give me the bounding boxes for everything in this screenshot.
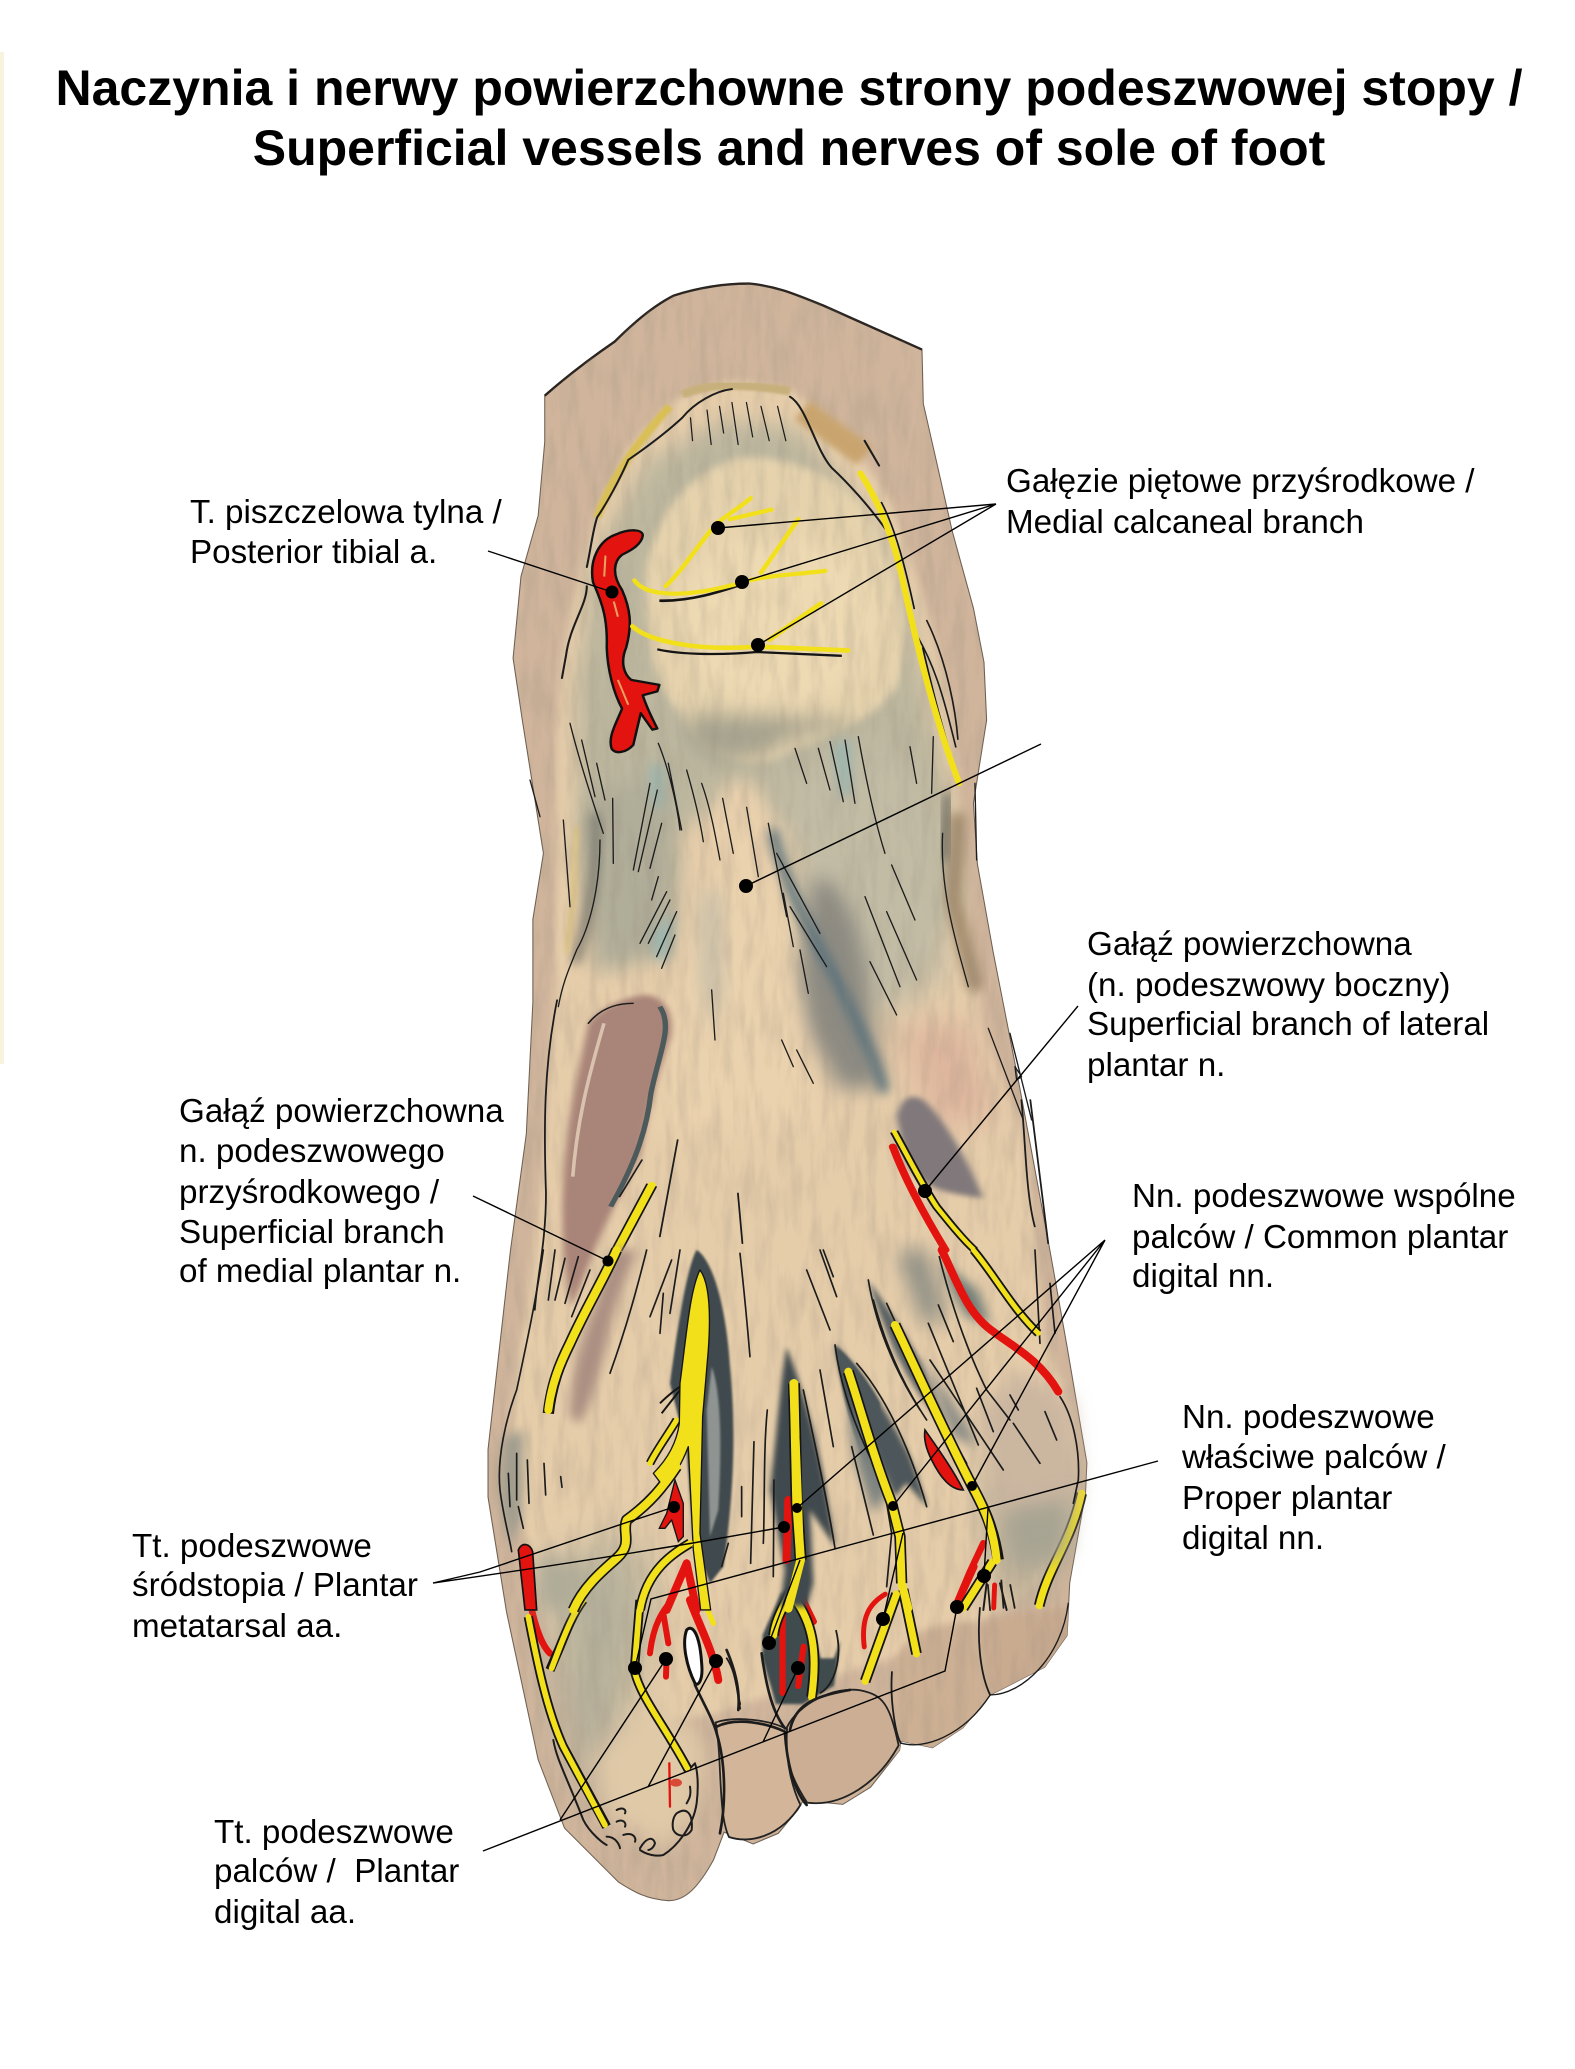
leader: posterior tibial — [488, 551, 618, 598]
medial nerve — [548, 1250, 617, 1410]
centre wedge dark — [770, 1347, 835, 1607]
leaders: medial calcaneal — [711, 504, 996, 652]
inner contour right — [790, 397, 885, 529]
artery lateral stub — [518, 1544, 537, 1610]
lateral artery — [942, 1250, 1058, 1392]
big-toe artery fork — [667, 1563, 697, 1610]
deep gray patch — [800, 877, 883, 1090]
artery centre — [783, 1599, 814, 1693]
ball shadow — [1003, 1497, 1070, 1567]
lesser toe bottom edges — [901, 1603, 1068, 1745]
leaders: plantar digital — [483, 1600, 964, 1851]
left gray band — [583, 770, 680, 973]
web toe tendon lines — [983, 1583, 1007, 1610]
lateral gray shade — [500, 1430, 523, 1550]
title: Superficial vessels and nerves of sole of foot — [253, 120, 1326, 176]
leader: lateral superficial branch — [918, 1006, 1078, 1198]
gray stripe in centre — [702, 887, 722, 1033]
left pit — [562, 995, 671, 1307]
digital trunk outlines — [848, 1325, 998, 1583]
third wedge dark — [835, 1345, 880, 1490]
inner tissue — [512, 380, 1079, 1728]
label: proper plantar digital: Proper plantar — [1182, 1480, 1392, 1517]
small branches outline — [650, 1420, 677, 1463]
left pit pale streak — [573, 1023, 604, 1177]
calcaneal nerve 2 — [632, 603, 848, 650]
second toe pad — [716, 1719, 800, 1839]
tendon hatch top — [690, 402, 786, 445]
lateral nerve upper outline — [894, 1132, 975, 1250]
label: common plantar digital: digital nn. — [1132, 1258, 1274, 1295]
hatch lines — [499, 1250, 833, 1577]
ink lines — [803, 1250, 1079, 1587]
label: medial superficial branch: Gałąź powierzchowna — [179, 1093, 504, 1130]
fourth toe pad — [892, 1623, 988, 1764]
title: Naczynia i nerwy powierzchowne strony podeszwowej stopy / — [56, 60, 1522, 116]
lateral nerve upper — [894, 1132, 975, 1250]
lateral nerve fill — [973, 1250, 1038, 1333]
label: proper plantar digital: Nn. podeszwowe — [1182, 1399, 1435, 1436]
digital nerves — [774, 1493, 1082, 1697]
fat rim right — [802, 410, 865, 456]
heel pad — [645, 458, 904, 762]
inner contour left — [562, 389, 732, 678]
nerve inner — [552, 1600, 687, 1768]
label: medial superficial branch: n. podeszwowego — [179, 1133, 445, 1170]
lateral artery upper — [893, 1147, 946, 1250]
leader: unlabeled aponeurosis — [739, 744, 1041, 893]
lateral branch — [573, 1467, 677, 1610]
texture overlay — [470, 270, 1100, 1910]
web artery — [988, 1585, 1000, 1608]
artery fork — [650, 1600, 672, 1677]
frayed branch lines — [660, 1387, 680, 1413]
label: plantar metatarsal: śródstopia / Plantar — [132, 1567, 418, 1604]
calcaneal nerve 2 outline — [657, 649, 842, 656]
medial nerve upper — [617, 1185, 652, 1250]
third toe pad — [786, 1690, 899, 1803]
big toe detail — [528, 1600, 850, 1856]
label: medial calcaneal: Medial calcaneal branch — [1006, 504, 1364, 541]
label: plantar metatarsal: metatarsal aa. — [132, 1608, 342, 1645]
right gray band — [782, 826, 954, 1020]
toe web lines — [695, 1650, 850, 1833]
second branch outline — [640, 1543, 690, 1610]
left forefoot detail — [499, 1250, 880, 1610]
leaders: plantar metatarsal — [433, 1501, 790, 1583]
heel lower band — [687, 713, 853, 762]
peach centre — [714, 774, 797, 1008]
right contour — [910, 621, 958, 747]
lateral nerve outline — [973, 1250, 1038, 1333]
midfoot washes — [567, 713, 1000, 1130]
central nerve right — [793, 1383, 800, 1560]
wedge 3 dark — [868, 1280, 947, 1423]
lesser toe pads, clipped to foot — [892, 1606, 1075, 1764]
nerve main trunk — [653, 1270, 711, 1610]
artery right fork — [690, 1600, 718, 1680]
lateral branch outline — [573, 1467, 677, 1610]
left rim yellow — [567, 827, 577, 953]
leaders: common plantar digital — [792, 1240, 1105, 1513]
wedge gray stripe — [707, 1367, 720, 1537]
right rim dark — [943, 793, 948, 860]
lateral calcaneal nerve — [860, 473, 959, 783]
label: medial superficial branch: przyśrodkowego / — [179, 1174, 440, 1211]
heel region detail — [562, 386, 959, 783]
label: posterior tibial: T. piszczelowa tylna / — [190, 494, 502, 531]
artery third — [863, 1594, 885, 1647]
leaders: proper plantar digital — [628, 1461, 1158, 1675]
central nerve trunk — [788, 1383, 801, 1608]
leader lines and dots — [433, 504, 1158, 1851]
label: lateral superficial branch: Superficial branch of lateral — [1087, 1006, 1489, 1043]
gray by artery — [537, 1550, 587, 1610]
big toe artery remnant — [666, 1763, 673, 1807]
toe nail scallops — [553, 1740, 698, 1856]
teal band — [940, 1260, 990, 1323]
fat rim — [597, 406, 670, 517]
artery highlight — [604, 556, 628, 705]
calcaneal nerve 1 outline — [659, 584, 742, 601]
big toe artery spot — [670, 1779, 682, 1787]
rose patch — [897, 1020, 1000, 1130]
midfoot hatching — [530, 723, 1032, 1120]
label: common plantar digital: Nn. podeszwowe wspólne — [1132, 1178, 1516, 1215]
label: medial superficial branch: of medial plantar n. — [179, 1253, 461, 1290]
toes — [716, 1493, 1082, 1839]
base washes — [512, 380, 1079, 1814]
lateral calcaneal nerve outline — [881, 502, 958, 778]
white gap — [685, 1628, 702, 1684]
pit lower — [570, 1250, 637, 1423]
skin outline of foot — [488, 284, 1087, 1901]
posterior tibial artery — [592, 530, 659, 752]
medial nerve outline — [548, 1250, 617, 1413]
fibre lines — [530, 723, 1032, 1120]
rosy gray ball — [977, 1370, 1077, 1517]
heel pad light centre — [678, 533, 878, 707]
toe separators — [891, 1608, 990, 1743]
label: medial superficial branch: Superficial branch — [179, 1214, 445, 1251]
small artery — [925, 1430, 963, 1490]
nerve inner outline — [550, 1600, 688, 1770]
central nerve trunk outline — [794, 1383, 801, 1560]
gray streak upper — [897, 1250, 943, 1330]
label: plantar metatarsal: Tt. podeszwowe — [132, 1528, 372, 1565]
contours — [535, 1000, 1048, 1310]
label: plantar digital: Tt. podeszwowe — [214, 1814, 454, 1851]
web tendon lines — [988, 1580, 1015, 1610]
second branch — [640, 1543, 690, 1610]
artery fifth — [959, 1567, 975, 1601]
digital nerve outlines — [774, 1493, 1082, 1697]
watercolour shading — [470, 270, 1100, 1910]
toe side contours — [727, 1631, 838, 1709]
left rim shadow — [575, 813, 596, 963]
big toe pale area — [593, 1693, 703, 1848]
calcaneal nerve 1 — [634, 498, 825, 594]
fat rim tan — [682, 386, 790, 395]
wedge 2 dark — [835, 1345, 928, 1508]
big toe gray shading — [551, 1530, 653, 1814]
small toe base shading — [989, 1438, 1066, 1589]
foot illustration — [470, 270, 1100, 1910]
teal streak — [773, 833, 883, 1088]
nerve outer — [528, 1617, 605, 1825]
background edge strip — [0, 52, 4, 1064]
right pit — [896, 1097, 983, 1198]
label: lateral superficial branch: (n. podeszwowy boczny) — [1087, 967, 1450, 1004]
fifth toe pad — [983, 1606, 1068, 1694]
small branch — [650, 1420, 677, 1463]
label: posterior tibial: Posterior tibial a. — [190, 534, 437, 571]
label: plantar digital: digital aa. — [214, 1894, 356, 1931]
red digital branch — [957, 1543, 983, 1603]
leader: medial superficial branch — [473, 1196, 614, 1266]
left pit dark edge — [611, 1007, 665, 1207]
label: plantar digital: palców / Plantar — [214, 1853, 459, 1890]
plantar metatarsal artery — [659, 1480, 683, 1542]
gray heel ring — [575, 419, 963, 950]
main wedge dark — [670, 1250, 733, 1583]
label: common plantar digital: palców / Common plantar — [1132, 1219, 1508, 1256]
arch pit and lateral bundle — [535, 995, 1048, 1310]
dark space centre — [762, 1571, 841, 1704]
label: proper plantar digital: właściwe palców / — [1181, 1439, 1447, 1476]
digital trunks — [848, 1325, 997, 1608]
label: medial calcaneal: Gałęzie piętowe przyśrodkowe / — [1006, 463, 1475, 500]
wedge 2 gray lower — [847, 1400, 890, 1513]
right rim brown — [953, 813, 977, 990]
nerve outer outline — [528, 1617, 607, 1827]
heavy top edge — [545, 284, 922, 396]
label: lateral superficial branch: plantar n. — [1087, 1047, 1225, 1084]
trunk end — [703, 1600, 713, 1623]
central artery — [787, 1500, 788, 1560]
medial nerve upper outline — [617, 1185, 652, 1250]
label: proper plantar digital: digital nn. — [1182, 1520, 1324, 1557]
label: lateral superficial branch: Gałąź powierzchowna — [1087, 926, 1412, 963]
artery branch — [530, 1600, 550, 1653]
wedge 3 gray — [920, 1357, 977, 1447]
teal hatch patch — [650, 740, 852, 960]
right forefoot detail — [793, 1250, 1079, 1610]
